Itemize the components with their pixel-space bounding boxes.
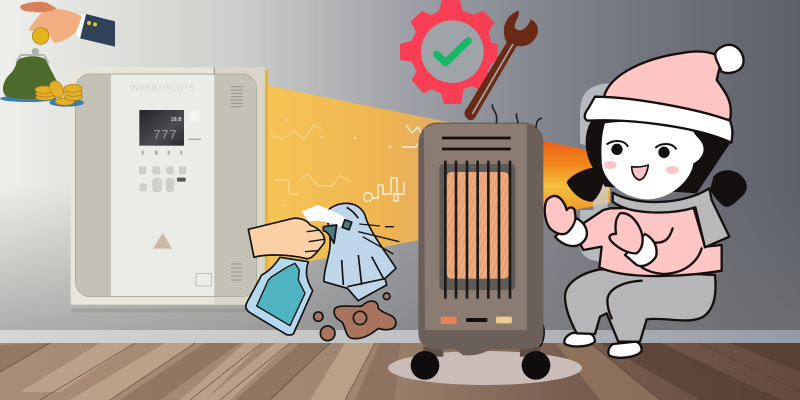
wall-mounted heater unit: 18:8 (171, 117, 181, 123)
floor shadow under heater (388, 351, 582, 385)
wall-mounted heater unit (71, 67, 268, 312)
spray lines (358, 224, 399, 254)
heat wisps (492, 105, 541, 127)
icon: hand dropping coin into purse (0, 2, 115, 107)
cloth (324, 203, 396, 301)
sleeve (80, 14, 115, 47)
display screen (139, 110, 184, 146)
wrench (465, 11, 538, 120)
wall-mounted heater unit: 777 (153, 129, 177, 144)
indicator lights (441, 317, 457, 324)
brand text: INVERTPILOTS (130, 84, 195, 93)
face (601, 122, 704, 199)
purse (0, 95, 57, 102)
body (573, 207, 722, 276)
orange heat beam (265, 85, 610, 270)
body (418, 123, 543, 355)
nozzle (302, 205, 350, 229)
hand (28, 9, 82, 43)
control buttons (139, 167, 186, 192)
dirt stain (334, 301, 396, 339)
vents (231, 87, 243, 280)
icon: maintenance gear with check and wrench (400, 0, 538, 120)
shoes (564, 333, 595, 346)
glow panel (439, 164, 515, 290)
bottle (246, 257, 313, 335)
girl character warming her hands (545, 45, 747, 358)
baseboard (0, 330, 800, 343)
spray bottle and cloth cleaning icon (246, 203, 399, 341)
gear (400, 0, 497, 104)
check mark (437, 41, 468, 63)
wood floor (0, 343, 800, 400)
top vents (442, 138, 511, 149)
grille bars (445, 161, 510, 299)
hair and pigtails (567, 117, 747, 207)
right mitten and cuff (625, 234, 657, 266)
warning triangle (152, 232, 172, 249)
wheels (423, 347, 443, 357)
legs (565, 269, 716, 342)
coin (32, 28, 49, 44)
hat (604, 51, 731, 120)
left cuff and mitten (555, 218, 587, 246)
translucent heater behind the girl (580, 83, 610, 262)
scarf (613, 188, 729, 247)
coin stacks (35, 78, 82, 105)
radiant heater (411, 105, 550, 380)
hand (248, 218, 325, 259)
